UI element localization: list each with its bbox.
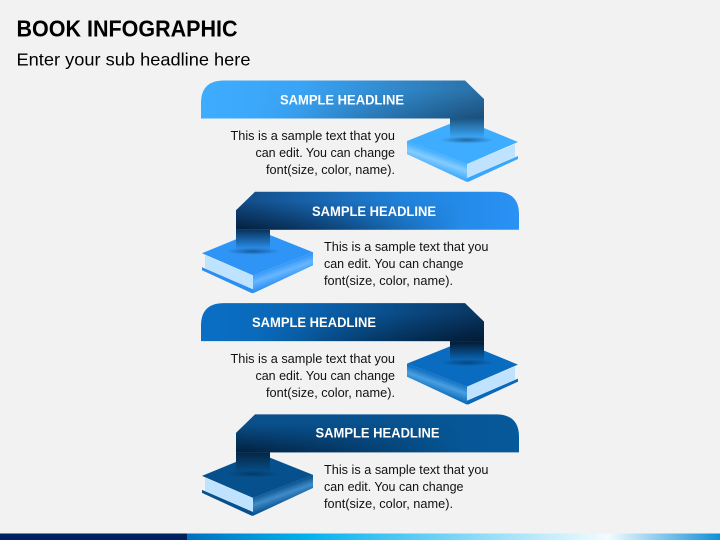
- body text 1: [230, 128, 395, 177]
- body text 3: This is a sample text that you: [230, 351, 395, 366]
- headline 3: SAMPLE HEADLINE: [252, 315, 376, 330]
- body text 1: can edit. You can change: [256, 145, 395, 160]
- ribbon 2: [226, 192, 519, 255]
- panel: step 2: [202, 192, 519, 293]
- panel: step 4: [202, 414, 519, 516]
- footer bar: [0, 534, 720, 540]
- book 4: [202, 453, 313, 516]
- panel: step 3: [201, 303, 518, 405]
- book 1: [407, 119, 518, 182]
- body text 4: can edit. You can change: [324, 479, 464, 494]
- body text 4: font(size, color, name).: [324, 496, 453, 511]
- ribbon 3: [201, 303, 494, 366]
- ribbon 4: [226, 414, 519, 477]
- book 3: [407, 342, 518, 405]
- body text 1: font(size, color, name).: [266, 162, 395, 177]
- body text 2: [324, 239, 488, 288]
- body text 2: font(size, color, name).: [324, 273, 453, 288]
- body text 3: [230, 351, 395, 400]
- body text 3: font(size, color, name).: [266, 385, 395, 400]
- body text 4: This is a sample text that you: [324, 462, 488, 477]
- headline 1: SAMPLE HEADLINE: [280, 92, 404, 108]
- body text 2: This is a sample text that you: [324, 239, 488, 254]
- body text 2: can edit. You can change: [324, 256, 464, 271]
- panel: step 1: [201, 80, 518, 182]
- title: BOOK INFOGRAPHIC: [16, 16, 238, 42]
- headline 2: SAMPLE HEADLINE: [312, 204, 436, 219]
- ribbon 1: [201, 80, 494, 144]
- book 2: [202, 230, 313, 293]
- body text 4: [324, 462, 488, 511]
- headline 4: SAMPLE HEADLINE: [316, 426, 440, 440]
- subtitle: Enter your sub headline here: [16, 50, 250, 70]
- body text 1: This is a sample text that you: [230, 128, 395, 143]
- body text 3: can edit. You can change: [256, 368, 395, 383]
